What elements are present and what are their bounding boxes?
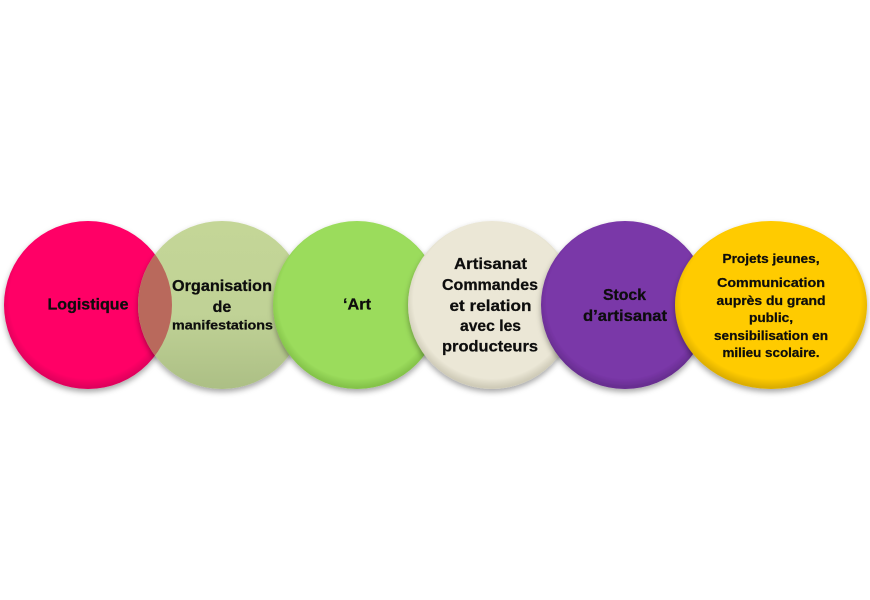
label: Artisanat commandes et relation avec les producteurs: producteurs [442,338,538,356]
label: Artisanat commandes et relation avec les producteurs: Commandes [442,277,538,294]
circle: Organisation de manifestations [138,221,306,389]
label: Stock d'artisanat: Stock [603,287,646,304]
label: Artisanat commandes et relation avec les producteurs: Artisanat [454,256,528,273]
diagram: chain of six activity circles [0,220,870,396]
label: Organisation de manifestations: manifestations [172,318,273,332]
label: Projets jeunes et communication: milieu scolaire. [722,345,820,360]
label: Stock d'artisanat [583,287,668,325]
ellipse: Projets jeunes [675,221,867,389]
label: Organisation de manifestations: de [213,299,231,316]
label: Artisanat commandes et relation avec les producteurs [442,256,538,356]
label: Projets jeunes et communication: public, [749,310,793,325]
overlap between Logistique and Organisation [138,254,172,356]
label: Projets jeunes et communication: Communication [717,275,825,290]
label: Artisanat commandes et relation avec les producteurs: avec les [460,318,521,335]
circle: Art [273,221,441,389]
label: Stock d'artisanat: d’artisanat [583,308,668,325]
label: Organisation de manifestations [172,278,273,332]
circle: Stock d'artisanat [541,221,709,389]
circle: Artisanat commandes [408,221,576,389]
label: Artisanat commandes et relation avec les producteurs: et relation [450,298,532,315]
label: Organisation de manifestations: Organisation [172,278,272,295]
label: Projets jeunes et communication: sensibilisation en [714,328,828,343]
label: Projets jeunes et communication [714,251,828,360]
label: Art: ‘Art [343,296,372,314]
label: Projets jeunes et communication: Projets jeunes, [722,251,820,266]
label: Projets jeunes et communication: auprès du grand [716,293,826,308]
label: Logistique: Logistique [48,296,129,314]
circle: Logistique [4,221,172,389]
